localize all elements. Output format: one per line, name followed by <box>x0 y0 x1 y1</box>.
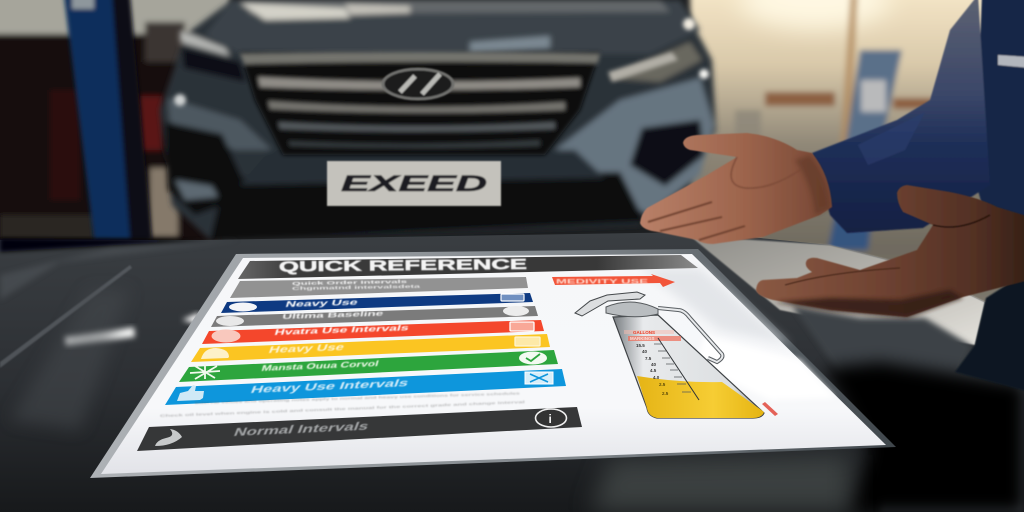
bar: red <box>202 320 544 344</box>
jug scale: 40 <box>642 349 648 354</box>
icon: left emblem <box>155 429 182 446</box>
fine print: Check oil level when engine is cold and consult the manual for the correct grade and change interval <box>160 400 525 418</box>
icon: left badge <box>201 348 229 359</box>
mechanic sleeve and torso <box>812 0 1024 392</box>
heading <box>238 255 698 279</box>
jug spout <box>575 292 645 316</box>
icon: left badge <box>216 316 244 326</box>
bar: navy heavy use <box>221 293 533 313</box>
icon: right badge <box>501 294 524 301</box>
car logo <box>383 69 453 99</box>
icon: info circle: i <box>548 412 552 426</box>
icon: left burst <box>190 364 220 379</box>
lower torso <box>955 270 1024 392</box>
right workshop <box>690 0 1024 360</box>
fine print <box>160 391 525 418</box>
jug handle <box>658 308 722 362</box>
bonnet shadow at right <box>792 306 1024 512</box>
jug scale: 40 <box>651 362 657 367</box>
bar: navy heavy use: Neavy Use <box>284 298 360 309</box>
headlight glints <box>174 18 709 106</box>
callout arrow <box>552 274 675 287</box>
background: workshop <box>0 0 1024 360</box>
bar: blue: Heavy Use Intervals <box>249 377 410 396</box>
lower hand <box>756 185 1024 318</box>
bonnet light area on the right <box>690 236 985 345</box>
laminate edge <box>90 249 896 478</box>
bar: dark normal intervals <box>137 407 582 451</box>
paper <box>101 254 886 474</box>
blue lift pillar <box>64 0 152 240</box>
car front <box>160 0 716 240</box>
bar: intro grey <box>230 277 528 298</box>
icon: info circle <box>536 409 566 427</box>
laminated reference sheet <box>90 249 896 478</box>
jug scale <box>636 338 699 400</box>
arm sleeve <box>812 0 990 233</box>
upper hand <box>640 133 832 244</box>
red pointer mark <box>762 402 778 416</box>
bar: grey baseline: Ultima Baseline <box>282 311 384 321</box>
bar: yellow <box>191 334 550 362</box>
icon: right check <box>519 352 547 364</box>
icon: left badge <box>212 330 240 342</box>
licence plate <box>327 161 501 206</box>
jug scale: 2.5 <box>662 391 669 396</box>
heading: QUICK REFERENCE <box>279 257 528 275</box>
icon: right badge <box>510 322 534 331</box>
fine print: Interval values and operating notes apply to normal and heavy use conditions for service schedules <box>195 391 520 405</box>
left workshop <box>0 0 230 250</box>
gloss on paper <box>695 335 835 400</box>
bar: grey baseline <box>211 306 538 327</box>
bonnet base <box>0 232 1024 512</box>
shoulder stripe <box>998 55 1024 68</box>
foreground bonnet <box>0 232 1024 512</box>
jug red label: MARKINGS <box>630 336 654 341</box>
licence plate: EXEED <box>341 171 487 196</box>
jug scale: 15.5 <box>636 343 645 348</box>
oil fill <box>637 376 764 418</box>
jug body <box>613 315 764 418</box>
icon: right badge <box>515 337 540 346</box>
bar: dark normal intervals: Normal Intervals <box>232 421 370 439</box>
jug red label: GALLONS <box>633 330 655 335</box>
bonnet reflections <box>0 240 850 512</box>
bonnet near edge band <box>0 238 210 252</box>
oil jug illustration <box>575 292 764 418</box>
bar: yellow: Heavy Use <box>267 342 347 356</box>
callout arrow: MEDIVITY USE <box>556 280 648 286</box>
icon: right badge <box>525 372 553 384</box>
car body <box>160 0 716 240</box>
torso <box>975 0 1024 225</box>
jug scale: 4.0 <box>653 375 660 380</box>
bar: red: Hvatra Use Intervals <box>273 323 411 337</box>
sleeve fold <box>858 112 925 165</box>
jug scale: 7.5 <box>645 356 652 361</box>
bar: green <box>179 350 558 382</box>
bar: green: Mansta Ouua Corvol <box>260 359 380 373</box>
jug scale: 4.5 <box>650 368 657 373</box>
bar: blue <box>165 369 566 405</box>
jug red label <box>624 330 681 341</box>
bar: intro grey: Chgnmatnd intervalsdeta <box>292 284 421 291</box>
jug scale: 2.5 <box>659 382 666 387</box>
icon: right badge <box>503 306 529 316</box>
icon: left badge <box>229 302 257 312</box>
jug lid <box>606 302 658 317</box>
icon: thumbs up <box>177 385 204 401</box>
grille <box>240 52 600 155</box>
bar: intro grey: Quick Order Intervals <box>292 279 408 287</box>
